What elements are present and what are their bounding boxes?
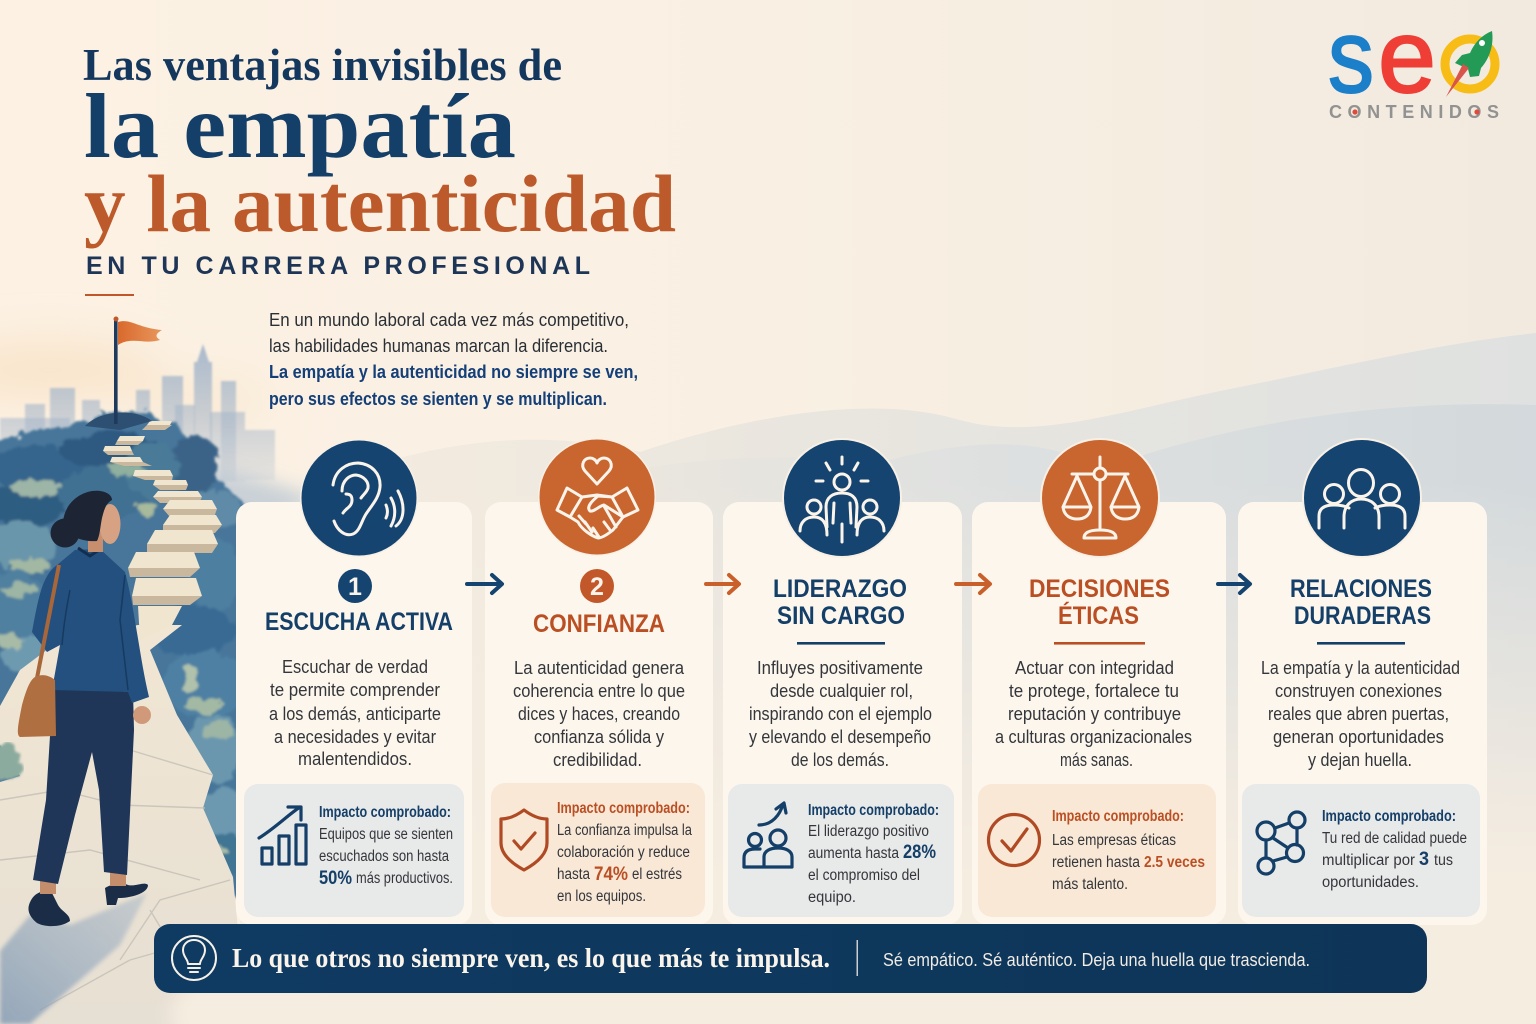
impact box: Impacto comprobado: <box>319 804 451 821</box>
banner headline: Lo que otros no siempre ven, es lo que más te impulsa. <box>232 943 830 973</box>
heading: CONFIANZA <box>533 610 665 638</box>
impact box: en los equipos. <box>557 888 646 905</box>
body text: confianza sólida y <box>534 726 665 747</box>
body text: y dejan huella. <box>1308 749 1412 770</box>
heading <box>1290 575 1432 630</box>
impact box: colaboración y reduce <box>557 844 690 861</box>
body text: te permite comprender <box>270 679 440 700</box>
body text: Influyes positivamente <box>757 657 923 678</box>
subtitle: EN TU CARRERA PROFESIONAL <box>86 252 590 280</box>
body text <box>1261 657 1460 770</box>
impact box: oportunidades. <box>1322 874 1419 891</box>
body text: reputación y contribuye <box>1008 703 1181 724</box>
heading rule <box>1317 642 1405 645</box>
panel: liderazgo sin cargo <box>723 438 962 925</box>
impact box: el compromiso del <box>808 867 920 884</box>
summit mound <box>85 412 152 430</box>
body text: a necesidades y evitar <box>274 726 436 747</box>
intro text: En un mundo laboral cada vez más competitivo, <box>269 309 629 330</box>
intro text: las habilidades humanas marcan la diferencia. <box>269 335 608 356</box>
icon: network nodes <box>1257 812 1305 874</box>
heading: LIDERAZGO <box>773 575 907 603</box>
body text: Actuar con integridad <box>1015 657 1174 678</box>
icon: people with rising arrow <box>744 803 792 867</box>
body text: Escuchar de verdad <box>282 656 428 677</box>
impact box: multiplicar por <box>1322 852 1415 869</box>
heading rule <box>797 642 885 645</box>
left bushes <box>0 744 22 780</box>
icon: growth chart <box>259 807 306 864</box>
impact box: el estrés <box>632 866 682 883</box>
impact box <box>491 783 705 917</box>
heading: ÉTICAS <box>1058 601 1139 630</box>
body text: desde cualquier rol, <box>770 680 913 701</box>
stone path <box>0 625 238 1024</box>
city skyline <box>0 344 275 482</box>
intro text <box>269 309 638 409</box>
body text: credibilidad. <box>553 749 642 770</box>
heading: DECISIONES <box>1029 575 1170 603</box>
heading <box>773 575 907 630</box>
intro text: La empatía y la autenticidad no siempre se ven, <box>269 361 638 382</box>
impact box: Equipos que se sienten <box>319 826 453 843</box>
impact box: 3 <box>1419 849 1429 870</box>
background mountains <box>240 333 1536 1024</box>
heading: ESCUCHA ACTIVA <box>265 608 453 636</box>
impact box: tus <box>1434 852 1453 869</box>
impact box: La confianza impulsa la <box>557 822 692 839</box>
sky haze <box>0 342 270 424</box>
impact box: El liderazgo positivo <box>808 823 929 840</box>
impact box <box>728 784 954 917</box>
body text: malentendidos. <box>298 748 412 769</box>
impact box: Tu red de calidad puede <box>1322 830 1467 847</box>
body text: a los demás, anticiparte <box>269 703 441 724</box>
title rule <box>85 294 134 296</box>
body text <box>749 657 932 770</box>
body text: La empatía y la autenticidad <box>1261 657 1460 678</box>
impact box: Impacto comprobado: <box>808 802 939 819</box>
body text <box>513 657 685 770</box>
flag on pole <box>114 316 162 424</box>
heading: DURADERAS <box>1294 602 1431 630</box>
icon: handshake and heart <box>538 438 656 556</box>
body text: La autenticidad genera <box>514 657 685 678</box>
heading <box>1029 575 1170 630</box>
heading: RELACIONES <box>1290 575 1432 603</box>
impact box: aumenta hasta <box>808 845 899 862</box>
heading rule <box>1054 642 1145 645</box>
body text: reales que abren puertas, <box>1268 703 1449 724</box>
path cracks <box>0 750 240 1010</box>
logo: SEO Contenidos: s <box>1328 0 1374 115</box>
body text <box>995 657 1192 770</box>
body text: inspirando con el ejemplo <box>749 703 932 724</box>
number badge 2 <box>580 569 614 603</box>
body text: de los demás. <box>791 749 889 770</box>
banner tagline: Sé empático. Sé auténtico. Deja una huella que trascienda. <box>883 949 1310 970</box>
panel: confianza <box>485 438 713 925</box>
banner divider <box>856 940 858 976</box>
impact box: hasta <box>557 866 590 883</box>
arrow 2 <box>706 575 739 593</box>
footer banner <box>154 924 1427 993</box>
body text: generan oportunidades <box>1273 726 1444 747</box>
impact box: 28% <box>903 842 936 863</box>
stairs <box>103 425 222 605</box>
impact box: 50% <box>319 868 352 889</box>
impact box <box>978 784 1216 917</box>
body text: coherencia entre lo que <box>513 680 685 701</box>
icon: shield with check <box>501 810 547 870</box>
title line 1: Las ventajas invisibles de <box>83 40 562 90</box>
logo: SEO Contenidos: e <box>1378 0 1436 115</box>
panel: escucha activa <box>236 439 472 925</box>
distant blue hills <box>150 467 320 540</box>
logo: SEO Contenidos: CONTENIDOS <box>1329 102 1499 122</box>
icon: scales of justice <box>1040 438 1160 558</box>
icon: ear <box>300 439 418 557</box>
panel: decisiones éticas <box>972 438 1226 925</box>
icon: check in circle <box>988 814 1040 866</box>
impact box <box>1242 784 1480 917</box>
number badge 1 <box>338 569 372 603</box>
impact box: Impacto comprobado: <box>557 800 690 817</box>
body text: construyen conexiones <box>1275 680 1442 701</box>
arrow 3 <box>956 575 990 593</box>
body text <box>269 656 441 769</box>
panel: relaciones duraderas <box>1238 438 1487 925</box>
impact box: más talento. <box>1052 876 1128 893</box>
title line 2: la empatía <box>84 75 516 177</box>
title line 3: y la autenticidad <box>84 158 676 249</box>
impact box: escuchados son hasta <box>319 848 449 865</box>
body text: y elevando el desempeño <box>749 726 931 747</box>
hillside foliage <box>0 411 251 900</box>
number 1: 1 <box>348 573 362 601</box>
title <box>83 40 676 280</box>
impact box: retienen hasta <box>1052 854 1140 871</box>
logo: SEO Contenidos <box>1328 0 1499 122</box>
icon: group of people <box>1302 438 1422 558</box>
body text: a culturas organizacionales <box>995 726 1192 747</box>
impact box: más productivos. <box>356 870 453 887</box>
body text: dices y haces, creando <box>518 703 680 724</box>
icon: light bulb <box>172 936 216 980</box>
impact box: Impacto comprobado: <box>1052 808 1184 825</box>
shadow <box>0 893 147 1024</box>
bottom fade <box>170 965 360 1024</box>
number 2: 2 <box>590 573 604 601</box>
impact box <box>244 784 464 917</box>
impact box: 2.5 veces <box>1144 854 1205 871</box>
icon: leader with team <box>782 438 902 558</box>
arrow 4 <box>1218 575 1250 593</box>
body text: más sanas. <box>1060 749 1133 770</box>
heading: SIN CARGO <box>777 602 905 630</box>
body text: te protege, fortalece tu <box>1009 680 1179 701</box>
impact box: 74% <box>594 864 628 885</box>
intro text: pero sus efectos se sienten y se multiplican. <box>269 388 607 409</box>
arrow 1 <box>467 575 502 593</box>
impact box: Las empresas éticas <box>1052 832 1176 849</box>
impact box: equipo. <box>808 889 856 906</box>
illustration: woman on the path to the summit <box>0 316 360 1024</box>
impact box: Impacto comprobado: <box>1322 808 1456 825</box>
woman <box>18 491 151 926</box>
